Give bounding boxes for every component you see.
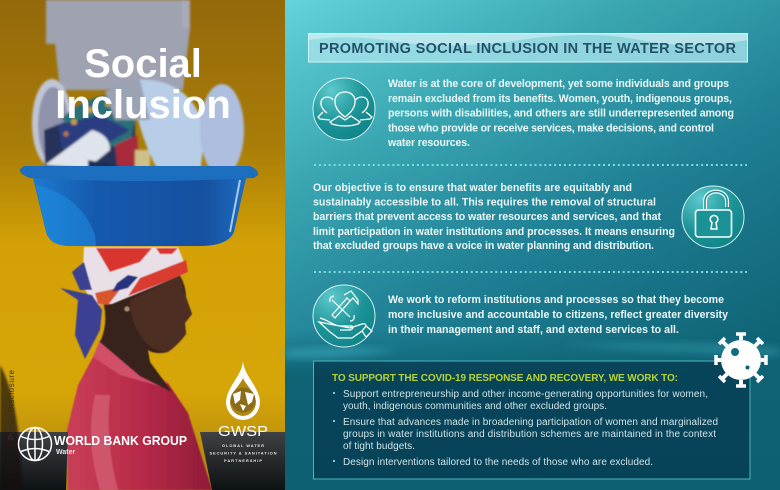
text block: water and exclusion: those who provide or receive services, make decisions, and control	[388, 122, 714, 134]
icon: water drop globe	[226, 361, 260, 420]
text block: water and exclusion: persons with disabilities, and others are still underrepresented among	[388, 108, 734, 120]
panel: photo of woman carrying a basin	[0, 0, 285, 490]
logo: GWSP: GLOBAL WATER	[222, 443, 264, 448]
text block: objective	[313, 182, 675, 252]
bullet list: youth, indigenous communities and other excluded groups.	[343, 401, 607, 412]
icon: open padlock	[682, 186, 744, 248]
logo: World Bank Group	[18, 428, 187, 460]
text block: objective: that excluded groups have a voice in water planning and distribution.	[313, 240, 654, 252]
text block: objective: Our objective is to ensure that water benefits are equitably and	[313, 182, 632, 194]
bullet list: groups in water institutions and distribution schemes are maintained in the context	[343, 429, 716, 440]
heading band: PROMOTING SOCIAL INCLUSION IN THE WATER SECTOR	[319, 41, 737, 57]
text block: reform: We work to reform institutions and processes so that they become	[388, 294, 724, 306]
text block: objective: sustainably accessible to all. This requires the removal of structural	[313, 196, 656, 208]
dark footer band	[0, 432, 285, 490]
logo: GWSP: GWSP	[218, 423, 268, 440]
icon: people group	[313, 78, 375, 140]
basin contents	[32, 79, 244, 176]
logo: GWSP: PARTNERSHIP	[224, 458, 262, 463]
text block: water and exclusion: remain excluded from its benefits. Women, youth, indigenous groups,	[388, 93, 732, 105]
text block: reform: in their management and staff, and extend services to all.	[388, 324, 679, 336]
photo side text: Public Disclosure	[7, 369, 16, 440]
bullet list: of tight budgets.	[343, 441, 415, 452]
text block: reform	[388, 294, 728, 336]
shirt	[67, 340, 212, 490]
text block: objective: limit participation in water institutions and processes. It means ensuring	[313, 226, 675, 238]
bullet list: Design interventions tailored to the needs of those who are excluded.	[343, 457, 653, 468]
callout heading: TO SUPPORT THE COVID-19 RESPONSE AND RECOVERY, WE WORK TO:	[332, 373, 678, 384]
bullet list: Support entrepreneurship and other income-generating opportunities for women,	[343, 389, 708, 400]
text block: water and exclusion: Water is at the core of development, yet some individuals and groups	[388, 78, 729, 90]
text block: water and exclusion	[387, 78, 734, 149]
bullet list	[333, 389, 718, 468]
head scarf	[60, 247, 188, 359]
basin	[20, 166, 258, 246]
panel: information background	[285, 0, 780, 490]
logo: GWSP: SECURITY & SANITATION	[210, 450, 277, 456]
logo: World Bank Group: Water	[56, 449, 75, 456]
text block: objective: barriers that prevent access to water resources and services, and that	[313, 211, 661, 223]
icon: tools in hand	[313, 285, 375, 347]
title: Inclusion	[55, 83, 231, 127]
title: Social	[84, 42, 202, 86]
logo: GWSP	[210, 361, 277, 463]
neck and face	[100, 272, 192, 392]
title	[55, 42, 231, 127]
bullet list: Ensure that advances made in broadening participation of women and marginalized	[343, 417, 718, 428]
logo: World Bank Group: WORLD BANK GROUP	[54, 434, 187, 448]
icon: globe	[18, 428, 52, 460]
callout: COVID-19 response	[314, 361, 750, 479]
text block: reform: more inclusive and accountable to citizens, reflect greater diversity	[388, 309, 728, 321]
wall poster	[46, 0, 190, 90]
heading band	[308, 34, 748, 62]
icon: coronavirus	[716, 334, 766, 386]
text block: water and exclusion: water resources.	[387, 137, 470, 149]
